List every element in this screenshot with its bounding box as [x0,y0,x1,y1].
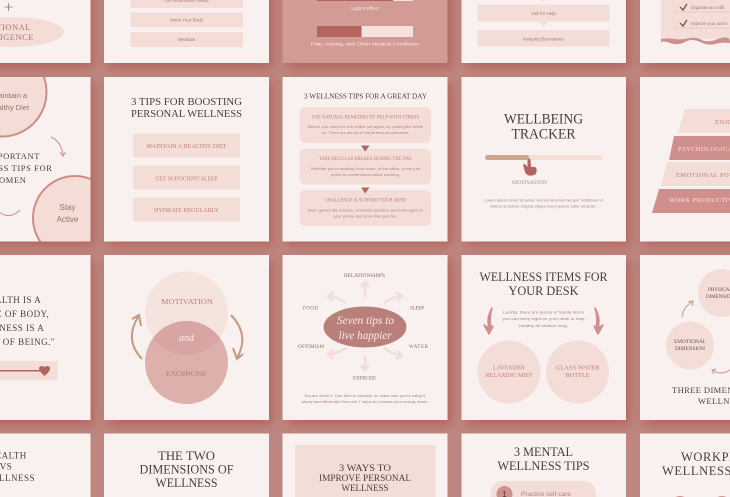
intro text [502,310,584,328]
slider [485,155,602,160]
tip box 1: USE NATURAL REMEDIES TO HELP WITH STRESS [312,116,419,120]
tip box 3: Brain games like Sudoku, crossword puzzles, and even apps on [308,208,423,212]
circle: stay active [32,175,90,242]
body text: Lorem ipsum dolor sit amet, sed do eiusmod tempor incididunt ut [484,198,604,202]
panel: checklist (top right): Organise an outfit [691,5,725,10]
panel: emotional intelligence (top left) [0,0,90,63]
panel: 3 ways to improve personal wellness: WELLNESS [342,484,388,494]
panel: 3 mental wellness tips: WELLNESS TIPS [498,459,590,473]
center ellipse: live happier [338,330,392,342]
icon: plus [4,3,12,11]
panel: stress steps flow: Ask for Help [531,11,556,16]
labels [298,274,429,382]
panel: wellbeing tracker [462,77,626,242]
heading: TRACKER [512,126,576,142]
footer text: You are worth it. Your time is valuable, so make sure you're using it [304,393,426,398]
arrow [682,301,693,317]
heading [131,97,242,120]
panel: wellness habits list (top): Move Your Body [170,18,204,22]
overlap [153,321,220,355]
panel: quote health [0,255,90,420]
heading: YOUR DESK [508,284,578,298]
panel: the two dimensions of wellness: WELLNESS [156,476,218,490]
icon: check marks [680,4,687,26]
circle: lavender relaxing mist: LAVENDER [493,366,525,372]
heading: WELLNESS ITEMS FOR [480,270,608,284]
tip rows: HYDRATE REGULARLY [154,208,220,214]
labels: SLEEP [410,306,424,312]
circle: stay active: Active [57,215,79,224]
tip pill [491,481,596,497]
arrow [51,137,63,156]
intro text: Luckily, there are plenty of handy items [503,310,584,314]
tip box 3 [300,190,431,226]
panel: 3 mental wellness tips: 3 MENTAL [514,445,573,459]
arrow: left [484,308,493,334]
tip box 1: on. There are plenty of herbal teas recommends. [322,130,410,135]
arrow [712,369,730,374]
labels: WATER [409,345,429,350]
circle: motivation [145,272,228,354]
icon: down triangle [361,188,370,194]
panel: 3 tips for boosting personal wellness [104,77,269,242]
circle: emotional dimension: DIMENSION [675,347,705,352]
arrow: right [594,308,603,334]
heading [672,385,730,406]
body text: labore et dolore magna aliqua lorem ipsum dolor sit amet. [490,204,596,208]
panel: checklist (top right): Improve your active [691,21,728,26]
panel: the two dimensions of wellness: THE TWO [158,449,215,463]
circle: stay active: Stay [59,203,76,212]
heading: 3 WELLNESS TIPS FOR A GREAT DAY [304,92,428,100]
circle: maintain a healthy diet [0,77,48,138]
tip box 3: your phone are more than just fun. [334,214,398,218]
panel: 3 ways to improve personal wellness [282,434,448,497]
footer text [302,393,428,404]
panel: motivation and exercise venn diagram: EXCERCISE [166,370,207,378]
panel: the two dimensions of wellness: DIMENSIONS OF [140,462,234,476]
panel: workplace wellness [640,434,730,497]
circle: lavender relaxing mist: RELAXING MIST [486,373,533,379]
ellipse label [0,17,64,47]
panel: 3 mental wellness tips [462,434,626,497]
tip box 2: prone to unintentional online scrolling. [331,172,400,177]
tip box 2: Whether you're working from home, in the office, or are just [311,166,421,171]
tip rows: GET SUFFICIENT SLEEP [156,176,218,182]
labels: EXERCISE [353,376,376,382]
labels: OPTIMISM [298,345,325,350]
heading: PERSONAL WELLNESS [131,109,242,120]
circle: emotional dimension: EMOTIONAL [674,340,706,345]
circle: glass water bottle [546,340,609,404]
panel: performance pyramid [640,77,730,242]
panel: 3 ways to improve personal wellness: 3 WAYS TO [339,464,391,474]
circle: exercise [145,321,228,404]
panel: motivation and exercise venn diagram: and [179,333,195,344]
panel: stress steps flow: Keeping Boundaries [523,36,565,42]
circle: lavender relaxing mist [478,340,540,404]
tip box 2 [300,148,431,184]
tip box 1: Before you reach for the coffee pot again, try putting the kettle [308,124,424,129]
icon: pointing hand [523,158,537,176]
panel: motivation and exercise venn diagram [104,255,269,420]
panel: wellness habits list (top) [104,0,269,63]
center ellipse: Seven tips to [337,315,394,327]
heading [480,270,608,298]
icon: down triangle [361,146,370,152]
panel: motivation and exercise venn diagram: MOTIVATION [161,298,213,306]
tip box 3: CHALLENGE & SUPPORT YOUR MIND [325,198,407,204]
panel: the two dimensions of wellness [104,434,269,497]
panel: checklist (top right) [640,0,730,63]
panel: three dimensions of wellness [640,255,730,420]
tip rows [133,134,240,222]
heading: WELLBEING [504,112,583,128]
center ellipse [324,306,406,348]
heading: 3 TIPS FOR BOOSTING [131,97,242,108]
body text [484,198,604,208]
labels: RELATIONSHIPS [344,274,385,279]
panel: light effect bar chart: Pain, Anxiety, and Other Medical Conditions [311,42,420,48]
labels: FOOD [303,306,318,312]
tip box 1 [300,107,431,143]
panel: stress steps flow [462,0,626,63]
arrow: right cycle [231,315,242,358]
intro text: you can keep right on your desk to stay [502,316,584,321]
footer text: wisely and efficiently! Here are 7 steps to increase your energy levels [302,399,428,404]
panel: health vs wellness [0,434,90,497]
circle: glass water bottle: GLASS WATER [556,366,600,372]
arrows [328,282,402,370]
intro text: healthy all season long. [519,323,568,328]
circle: glass water bottle: BOTTLE [566,373,590,379]
circle: emotional dimension [666,322,714,370]
panel: 3 wellness tips for a great day [282,77,448,242]
panel: wellness habits list (top): Meditate [178,37,196,42]
tip box 2: TAKE REGULAR BREAKS DURING THE DAY [319,157,413,162]
heart slider [0,361,58,380]
heading [504,112,583,142]
panel: health vs wellness: VS [0,462,12,472]
tip rows: MAINTAIN A HEALTHY DIET [146,144,227,150]
panel: wellbeing tracker: MOTIVATION [512,181,547,186]
circle: physical dimension [698,269,730,317]
panel: seven tips to live happier [282,255,448,420]
panel: important wellness tips for women [0,77,90,242]
panel: wellness items for your desk [462,255,626,420]
panel: light effect bar chart [282,0,448,63]
panel: light effect bar chart: Light's Effect [351,6,379,12]
arrow: left cycle [132,317,142,359]
panel: 3 ways to improve personal wellness: IMPROVE PERSONAL [319,474,411,484]
